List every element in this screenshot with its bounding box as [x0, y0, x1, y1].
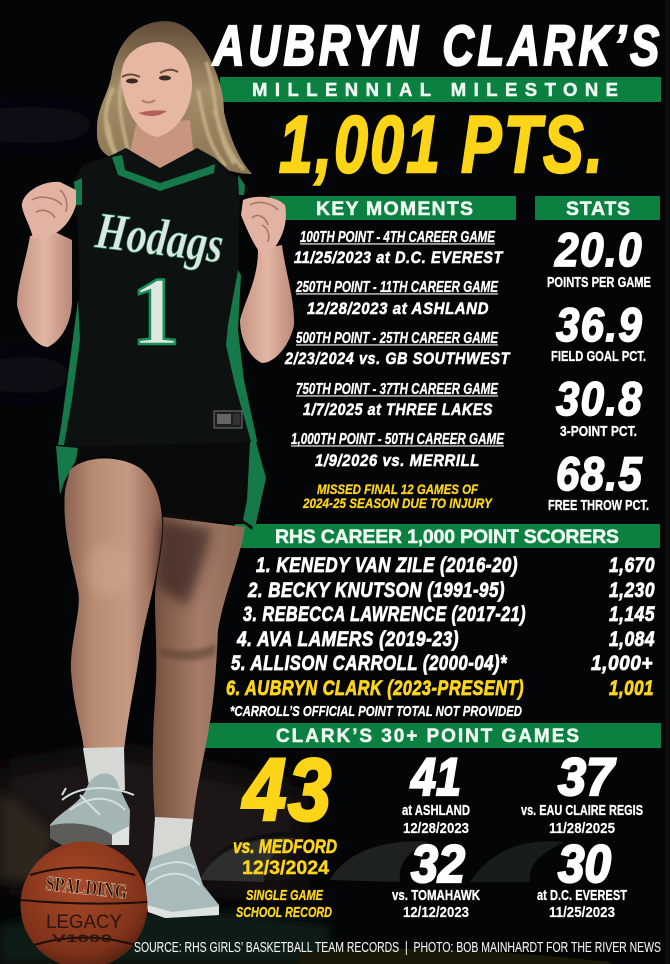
scorer 1: 1,670: [609, 554, 655, 577]
right fist: [241, 197, 286, 258]
moment: 250th point: [295, 279, 498, 318]
ball brand: SPALDING: [44, 871, 129, 904]
neck: [130, 120, 194, 170]
stat: 3-point pct: 30.8: [556, 372, 643, 425]
background wave logo: [0, 832, 610, 964]
green bar: career scorers: [235, 524, 660, 548]
game 32: vs. TOMAHAWK: [392, 887, 480, 904]
jersey green trim: [58, 155, 258, 445]
moment: 100th point: [294, 229, 504, 267]
jersey tag: [214, 411, 242, 428]
green bar: stats: [535, 196, 660, 220]
heading: 30+ point games: CLARK’S 30+ POINT GAMES: [276, 726, 579, 747]
record game 43: SINGLE GAME: [246, 887, 324, 904]
scorer 1: 1. KENEDY VAN ZILE (2016-20): [256, 554, 518, 577]
scorer 4: [236, 628, 655, 651]
game 41: 41: [410, 748, 461, 807]
injury note: 2024-25 SEASON DUE TO INJURY: [302, 495, 493, 511]
right shoe: [145, 845, 219, 918]
record game 43: 43: [241, 740, 333, 839]
moment: 250th point: 12/28/2023 at ASHLAND: [307, 299, 489, 318]
subtitle in bar: MILLENNIAL MILESTONE: [252, 79, 618, 100]
jersey number: 1: [131, 258, 180, 366]
moment: 1000th point: 1/9/2026 vs. MERRILL: [315, 451, 480, 470]
green bar: 30+ point games: [205, 723, 661, 748]
game 30: 30: [558, 835, 611, 894]
panel: 30+ point games: [233, 740, 643, 921]
heading: key moments: KEY MOMENTS: [316, 198, 473, 220]
game 37: 11/28/2025: [549, 820, 615, 837]
heading: career scorers: RHS CAREER 1,000 POINT SCORERS: [275, 526, 619, 548]
moment: 750th point: 750TH POINT - 37TH CAREER GAME: [296, 381, 498, 398]
game 37: 37: [558, 748, 616, 807]
scorer 3: 1,145: [609, 603, 655, 626]
hair strands: [106, 62, 244, 170]
record game 43: [233, 740, 337, 921]
leg shadows: [86, 520, 216, 660]
stat: 3-point pct: 3-POINT PCT.: [560, 423, 637, 440]
green bar: millennial milestone: [220, 77, 661, 102]
green bar: key moments: [270, 196, 516, 220]
moment: 1000th point: [291, 431, 504, 470]
moment: 500th point: [284, 330, 511, 368]
hair: [97, 21, 252, 174]
scorer 5: 5. ALLISON CARROLL (2000-04)*: [231, 652, 507, 675]
game 30: at D.C. EVEREST: [537, 887, 627, 904]
scorer 4: 4. AVA LAMERS (2019-23): [236, 628, 459, 651]
right sock: [152, 817, 193, 862]
panel: key moments: [284, 229, 511, 511]
panel: career scorers table: [226, 554, 655, 720]
game 41: 12/28/2023: [403, 820, 469, 837]
stat: field goal pct: 36.9: [556, 298, 643, 351]
left fist: [22, 182, 76, 238]
record game 43: vs. MEDFORD: [233, 837, 337, 858]
scorer 6 highlighted: 6. AUBRYN CLARK (2023-PRESENT): [226, 677, 524, 700]
record game 43: SCHOOL RECORD: [236, 904, 332, 921]
left arm: [17, 232, 72, 347]
game 32: 12/12/2023: [403, 904, 469, 921]
left shoe: [50, 774, 134, 845]
moment: 100th point: 11/25/2023 at D.C. EVEREST: [294, 248, 504, 267]
game 30: 11/25/2023: [549, 904, 615, 921]
scorer 2: 1,230: [609, 579, 655, 602]
moment: 750th point: [296, 381, 498, 419]
game 32: [392, 835, 480, 921]
scorer 2: 2. BECKY KNUTSON (1991-95): [247, 579, 505, 602]
table footnote: *CARROLL’S OFFICIAL POINT TOTAL NOT PROVIDED: [230, 703, 522, 720]
game 41: at ASHLAND: [402, 802, 470, 819]
moment: 500th point: 500TH POINT - 25TH CAREER GAME: [296, 330, 498, 347]
jersey: [60, 148, 252, 447]
injury note: MISSED FINAL 12 GAMES OF: [317, 481, 478, 497]
scorer 4: 1,084: [609, 628, 655, 651]
game 32: 32: [411, 835, 465, 894]
shorts green trim: [56, 442, 266, 528]
player photo illustration: [17, 21, 294, 964]
moment: 100th point: 100TH POINT - 4TH CAREER GAME: [300, 229, 495, 246]
heading: stats: STATS: [566, 198, 630, 220]
face: [121, 42, 192, 137]
shorts: [57, 442, 264, 530]
game 37: [521, 748, 643, 837]
left sock: [83, 747, 125, 792]
game 41: [402, 748, 470, 837]
basketball: [20, 842, 148, 964]
game 30: [537, 835, 627, 921]
ball model number: V1000: [52, 933, 112, 945]
moment: 1000th point: 1,000TH POINT - 50TH CAREER GAME: [291, 431, 504, 448]
jersey wordmark: Hodags: [92, 202, 227, 275]
moment: 500th point: 2/23/2024 vs. GB SOUTHWEST: [284, 349, 511, 368]
right leg: [153, 517, 245, 822]
scorer 6 highlighted: 1,001: [609, 677, 654, 700]
ball model: LEGACY: [46, 912, 122, 933]
moment: 250th point: 250TH POINT - 11TH CAREER GAME: [295, 279, 498, 296]
record game 43: 12/3/2024: [242, 858, 329, 879]
stat: free throw pct: 68.5: [556, 447, 643, 500]
right arm: [240, 245, 294, 363]
moment: 750th point: 1/7/2025 at THREE LAKES: [303, 400, 493, 419]
stat: points per game: 20.0: [554, 223, 643, 276]
face features: [122, 70, 178, 116]
left leg: [64, 458, 162, 750]
panel: stats: [547, 223, 651, 514]
scorer 5: 1,000+: [591, 652, 653, 675]
injury note: [302, 481, 493, 511]
scorer 3: 3. REBECCA LAWRENCE (2017-21): [243, 603, 526, 626]
